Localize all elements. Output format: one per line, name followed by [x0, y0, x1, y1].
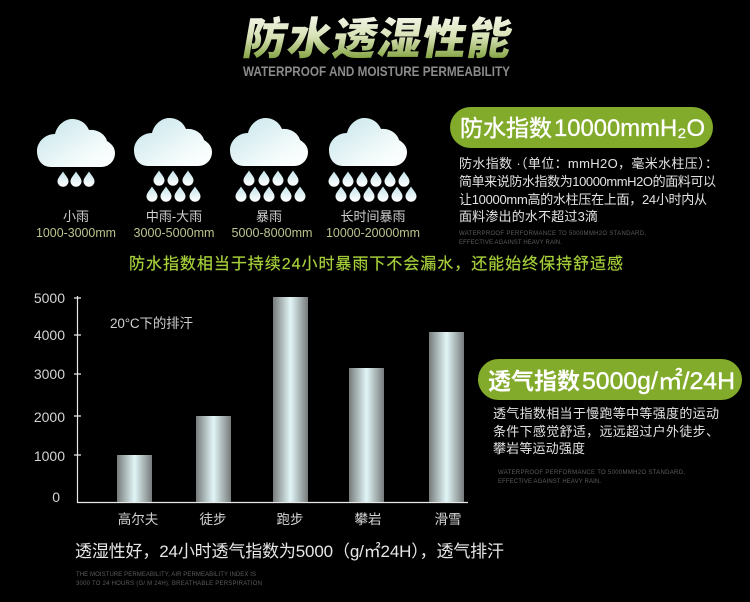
bar chart	[34, 290, 468, 527]
label: moderate rain: 中雨-大雨	[146, 209, 202, 224]
text: waterproof english note	[459, 231, 646, 246]
text: breathability english note	[498, 470, 685, 485]
x-axis labels: 跑步	[276, 512, 304, 527]
text: waterproof description	[459, 156, 718, 224]
icon: cloud light rain	[37, 119, 115, 167]
text: waterproof english note: EFFECTIVE AGAINST HEAVY RAIN.	[459, 240, 562, 246]
icon: cloud rainstorm	[230, 118, 308, 166]
text: bottom english note	[76, 572, 262, 587]
text: breathability description: 攀岩等运动强度	[493, 441, 585, 456]
y-axis labels: 5000	[34, 290, 65, 306]
range: rainstorm: 5000-8000mm	[232, 226, 312, 240]
bars	[117, 297, 464, 502]
subtitle: WATERPROOF AND MOISTURE PERMEABILITY	[243, 63, 511, 79]
pill: waterproof heading	[450, 107, 713, 148]
text: bottom english note: 3000 TO 24 HOURS (G/ M 24H), BREATHABLE PERSPIRATION	[76, 581, 262, 587]
callout: green summary: 防水指数相当于持续24小时暴雨下不会漏水，还能始终保持舒适感	[129, 255, 623, 273]
icon: cloud prolonged rainstorm	[329, 118, 407, 166]
icon: drops light rain	[58, 172, 94, 187]
icon: cloud moderate rain	[134, 118, 212, 166]
pill: waterproof heading: 10000mmH₂O	[554, 115, 705, 142]
panel: waterproof index	[450, 107, 718, 246]
text: breathability description: 透气指数相当于慢跑等中等强度的运动	[493, 406, 719, 421]
text: breathability english note: EFFECTIVE AGAINST HEAVY RAIN.	[498, 479, 601, 485]
y-axis labels: 3000	[34, 366, 65, 382]
label: light rain: 小雨	[63, 209, 89, 224]
x-axis labels: 高尔夫	[118, 511, 159, 527]
pill: waterproof heading: 防水指数	[460, 115, 552, 141]
x-axis labels: 滑雪	[434, 512, 462, 527]
text: bottom english note: THE MOISTURE PERMEABILITY, AIR PERMEABILITY INDEX IS	[76, 572, 256, 578]
y-axis labels: 0	[52, 489, 60, 505]
label: prolonged rainstorm: 长时间暴雨	[340, 209, 406, 224]
x-axis labels: 攀岩	[354, 512, 382, 527]
pill: breathability heading: 5000g/㎡/24H	[582, 368, 735, 395]
text: waterproof description: 让10000mm高的水柱压在上面，24小时内从	[459, 192, 707, 207]
text: waterproof description: 简单来说防水指数为10000mmH2O的面料可以	[459, 174, 716, 189]
icon: drops prolonged rainstorm	[328, 172, 416, 202]
title: 防水透湿性能	[239, 15, 516, 64]
icon: drops moderate rain	[146, 170, 200, 202]
x-axis labels	[118, 511, 462, 527]
rain level: moderate to heavy rain	[134, 118, 214, 240]
icon: drops rainstorm	[236, 170, 306, 202]
panel: breathability index	[478, 359, 742, 485]
range: light rain: 1000-3000mm	[36, 226, 116, 240]
rain level: prolonged rainstorm	[326, 118, 420, 240]
text: waterproof description: 面料渗出的水不超过3滴	[459, 209, 598, 224]
y-axis labels	[34, 290, 65, 505]
range: moderate rain: 3000-5000mm	[134, 226, 214, 240]
y-axis labels: 4000	[34, 327, 65, 343]
text: breathability description	[493, 406, 719, 456]
label: rainstorm: 暴雨	[256, 209, 282, 224]
x-axis labels: 徒步	[200, 512, 226, 527]
pill: breathability heading: 透气指数	[488, 368, 580, 394]
range: prolonged rainstorm: 10000-20000mm	[326, 226, 420, 240]
rain level: rainstorm	[230, 118, 312, 240]
pill: breathability heading	[478, 359, 742, 400]
rain level: light rain	[36, 119, 116, 240]
chart axes	[74, 296, 468, 502]
y-axis labels: 1000	[34, 448, 65, 464]
text: breathability english note: WATERPROOF PERFORMANCE TO 5000MMH2O STANDARD,	[498, 470, 685, 476]
y-axis labels: 2000	[34, 409, 65, 425]
chart note: 20°C下的排汗	[110, 316, 193, 331]
text: breathability description: 条件下感觉舒适，远远超过户外徒步、	[493, 424, 719, 439]
text: bottom summary: 透湿性好，24小时透气指数为5000（g/㎡24H），透气排汗	[75, 542, 504, 561]
text: waterproof description: 防水指数 ·（单位：mmH2O，毫米水柱压）：	[459, 156, 718, 171]
text: waterproof english note: WATERPROOF PERFORMANCE TO 5000MMH2O STANDARD,	[459, 231, 646, 237]
